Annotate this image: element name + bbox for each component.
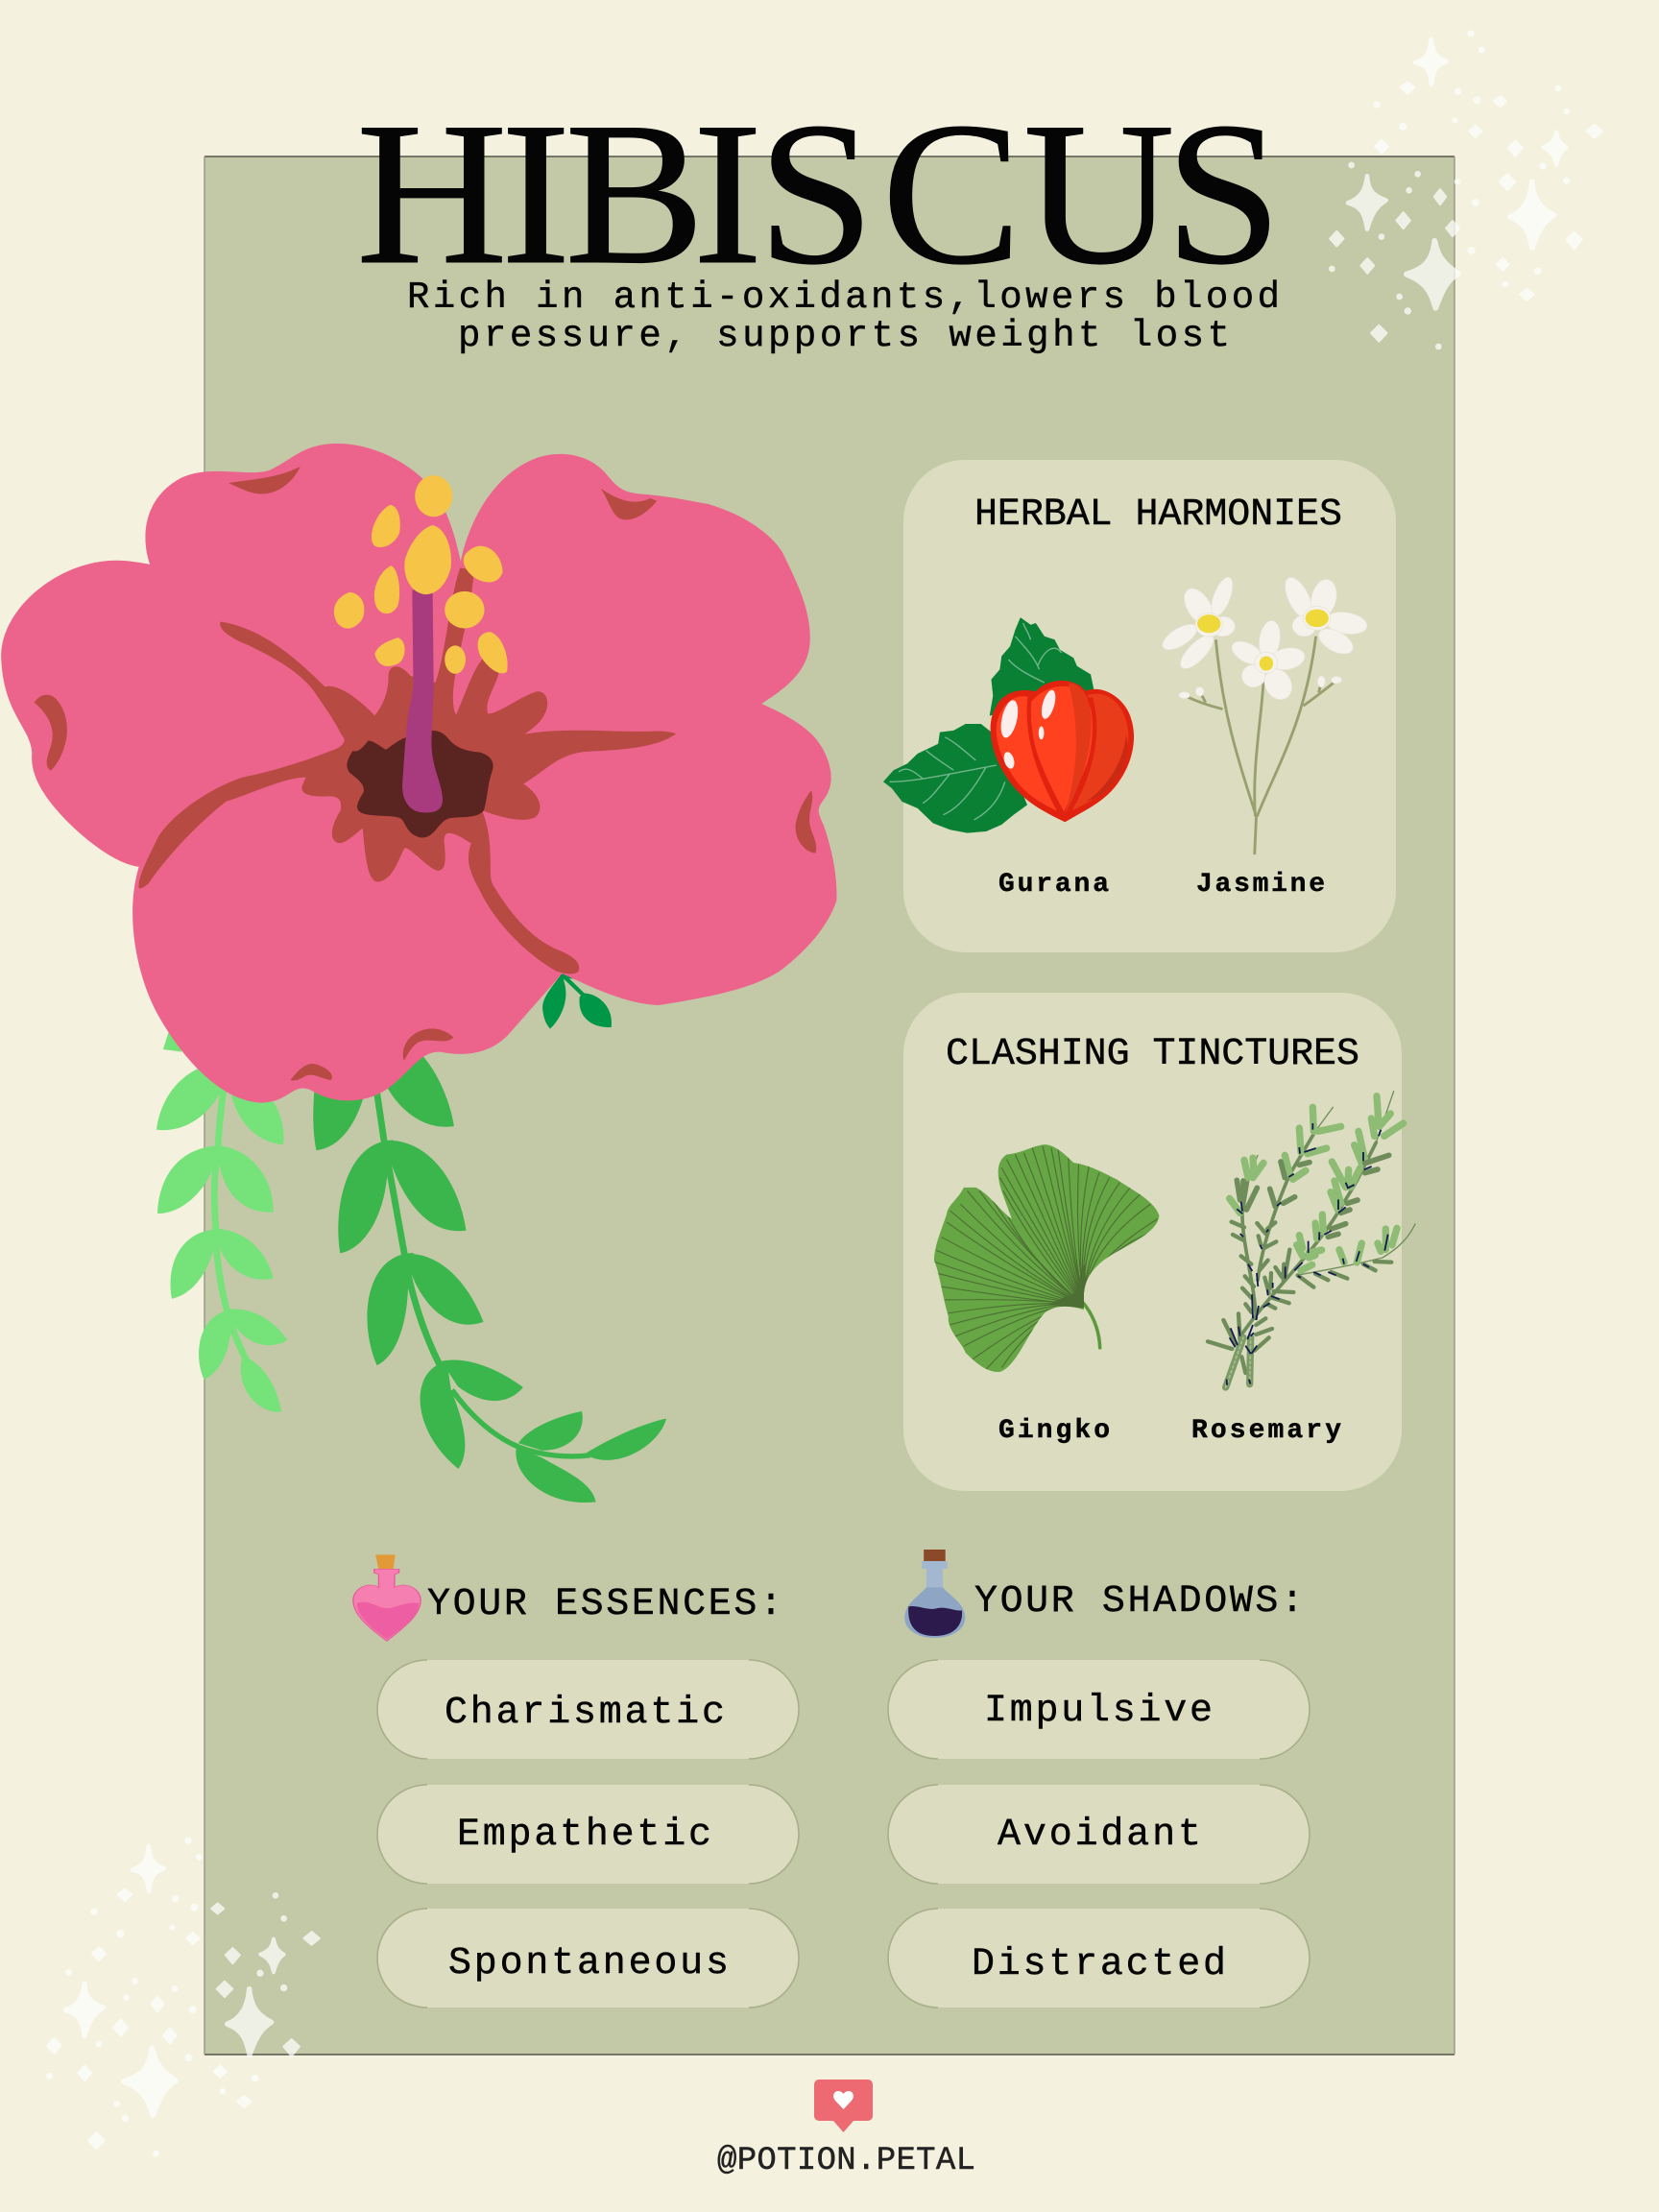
pill: charismatic: Charismatic xyxy=(445,1692,725,1735)
panel: clashing tinctures xyxy=(903,993,1415,1491)
subtitle: pressure, supports weight lost xyxy=(458,315,1230,357)
illustration: gurana xyxy=(883,617,1134,833)
pill: spontaneous: Spontaneous xyxy=(448,1942,729,1985)
icon: heart potion xyxy=(353,1554,421,1641)
sparkles: bottom left xyxy=(46,1838,320,2157)
pill: impulsive xyxy=(888,1660,1310,1759)
vine: light green xyxy=(156,1030,287,1412)
flower center veins xyxy=(139,568,676,974)
subtitle: Rich in anti-oxidants,lowers blood xyxy=(407,276,1280,319)
pill: empathetic xyxy=(377,1785,799,1884)
pill: spontaneous xyxy=(377,1909,799,2008)
panel: main sage background xyxy=(204,156,1455,2055)
illustration: hibiscus flower xyxy=(1,444,836,1103)
illustration: hanging vines xyxy=(156,972,666,1503)
dark center xyxy=(347,731,493,838)
pill: charismatic xyxy=(377,1660,799,1759)
section: your essences xyxy=(353,1554,799,2008)
pill: empathetic: Empathetic xyxy=(457,1814,711,1857)
vine: mid green xyxy=(313,1054,666,1503)
heading: clashing tinctures: CLASHING TINCTURES xyxy=(946,1033,1359,1076)
pill: distracted: Distracted xyxy=(972,1943,1226,1986)
footer handle: @POTION.PETAL xyxy=(717,2143,975,2179)
illustration: gingko leaf xyxy=(934,1144,1159,1372)
pill: distracted xyxy=(888,1909,1310,2008)
petal markings xyxy=(35,467,816,1081)
subtitle xyxy=(407,276,1280,357)
pill: impulsive: Impulsive xyxy=(984,1690,1213,1733)
heading: your essences: YOUR ESSENCES: xyxy=(427,1583,782,1626)
stamens anthers xyxy=(334,475,508,674)
panel: herbal harmonies xyxy=(883,460,1396,952)
pill: avoidant xyxy=(888,1785,1310,1884)
sprig: dark green xyxy=(542,972,612,1029)
sparkles: top right xyxy=(1329,30,1602,349)
title: HIBISCUS xyxy=(356,80,1282,306)
icon: blue potion bottle xyxy=(904,1550,965,1638)
icon: like heart bubble xyxy=(814,2080,873,2132)
petals xyxy=(1,444,836,1103)
illustration: jasmine xyxy=(1158,574,1369,854)
pistil style xyxy=(402,589,443,812)
section: your shadows xyxy=(888,1550,1310,2008)
heading: your shadows: YOUR SHADOWS: xyxy=(974,1580,1304,1623)
label: gingko: Gingko xyxy=(998,1416,1110,1446)
gingko veins xyxy=(935,1146,1158,1369)
label: rosemary: Rosemary xyxy=(1191,1416,1341,1446)
illustration: rosemary xyxy=(1208,1092,1415,1387)
label: jasmine: Jasmine xyxy=(1196,870,1325,900)
heading: herbal harmonies: HERBAL HARMONIES xyxy=(974,493,1342,537)
label: gurana: Gurana xyxy=(998,870,1109,900)
pill: avoidant: Avoidant xyxy=(998,1814,1201,1857)
